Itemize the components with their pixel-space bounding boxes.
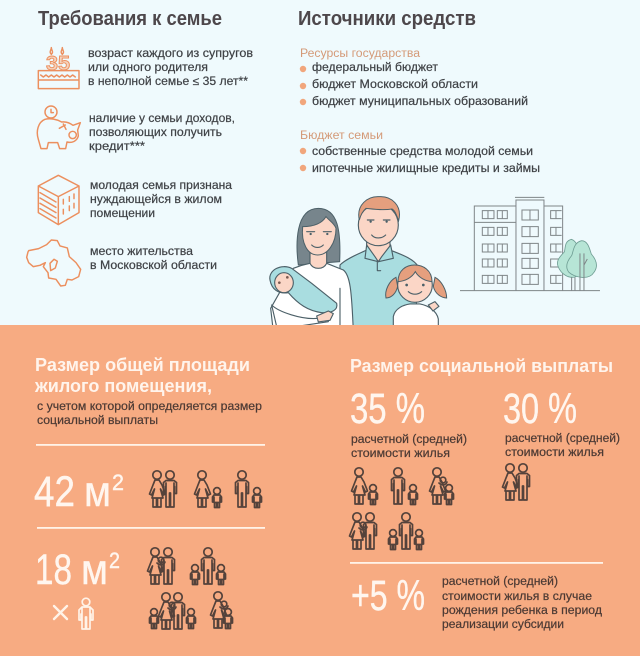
text: plus 5 percent caption: расчетной (средней)	[442, 576, 558, 588]
stat: 35 percent: 35 %	[350, 385, 425, 433]
text: income requirement: позволяющих получить	[89, 127, 222, 139]
text: 35 percent caption: стоимости жилья	[351, 448, 450, 460]
text: plus 5 percent caption: стоимости жилья в случае	[442, 591, 592, 603]
text: housing need: помещении	[90, 208, 155, 220]
list: state budget items: федеральный бюджет	[312, 62, 439, 74]
stat: 30 percent: 30 %	[503, 385, 577, 433]
icon: Moscow region map	[27, 240, 81, 286]
text: plus 5 percent caption: рождения ребенка в период	[442, 605, 602, 617]
icon: piggy bank with coin	[37, 106, 80, 149]
text: 30 percent caption: стоимости жилья	[505, 447, 604, 459]
heading: floor area	[34, 354, 250, 396]
list: state budget items	[300, 62, 528, 108]
text: income requirement: кредит***	[89, 141, 146, 153]
woman with baby	[270, 208, 353, 332]
illustration: apartment building and trees	[460, 197, 600, 291]
label: family budget: Бюджет семьи	[300, 130, 383, 142]
stat: 18 square metres: 2	[109, 548, 120, 573]
label: state resources: Ресурсы государства	[300, 48, 421, 60]
icons: families for 42 m2	[150, 471, 262, 508]
list: family budget items	[300, 146, 540, 175]
text: plus 5 percent caption: реализации субсидии	[442, 619, 564, 631]
heading: sources: Источники средств	[298, 8, 476, 30]
list: state budget items: бюджет Московской области	[312, 79, 478, 91]
text: 35 percent caption: расчетной (средней)	[351, 434, 467, 446]
background: upper light panel	[0, 0, 640, 326]
stat: 42 square metres: 42	[34, 468, 75, 516]
text: floor area subtitle: социальной выплаты	[37, 415, 158, 427]
text: 30 percent caption: расчетной (средней)	[505, 433, 620, 445]
icons: families for 18 m2	[148, 548, 232, 629]
girl	[386, 265, 447, 332]
text: age requirement: или одного родителя	[88, 62, 208, 74]
text: floor area subtitle: с учетом которой определяется размер	[37, 401, 262, 413]
panel: requirements for the family	[27, 8, 253, 286]
icon: birthday cake 35: 35	[46, 53, 70, 75]
text: residence	[90, 246, 217, 272]
man	[340, 197, 418, 332]
icons: families for 35 percent	[350, 468, 454, 550]
text: housing need	[90, 180, 233, 220]
icon: times one person	[54, 598, 93, 629]
text: age requirement: в неполной семье ≤ 35 лет**	[88, 76, 249, 88]
list: family budget items: ипотечные жилищные кредиты и займы	[312, 163, 540, 175]
stat: 18 square metres	[35, 546, 120, 594]
panel: sources of funds	[298, 8, 540, 175]
stat: 42 square metres	[34, 468, 124, 516]
text: income requirement: наличие у семьи доходов,	[89, 113, 235, 125]
stat: 18 square metres: 18	[35, 546, 72, 594]
text: housing need: молодая семья признана	[90, 180, 233, 192]
list: family budget items: собственные средства молодой семьи	[312, 146, 533, 158]
icon: apartment block	[38, 175, 79, 225]
panel: lower orange area	[0, 325, 640, 656]
text: residence: место жительства	[90, 246, 194, 258]
text: age requirement: возраст каждого из супругов	[88, 48, 253, 60]
text: income requirement	[89, 113, 235, 153]
panel: total floor area	[34, 354, 265, 629]
icon: birthday cake 35	[38, 48, 79, 89]
stat: plus 5 percent: +5 %	[351, 572, 425, 620]
icons: couple for 30 percent	[502, 464, 530, 500]
text: housing need: нуждающейся в жилом	[90, 194, 222, 206]
text: age requirement	[88, 48, 253, 88]
text: plus 5 percent caption	[442, 576, 602, 631]
stat: 18 square metres: м	[81, 546, 108, 594]
illustration: family	[270, 197, 447, 332]
heading: floor area: жилого помещения,	[34, 375, 212, 396]
heading: requirements: Требования к семье	[38, 8, 222, 30]
heading: social payment: Размер социальной выплаты	[350, 355, 613, 376]
heading: floor area: Размер общей площади	[35, 354, 250, 375]
text: 30 percent caption	[505, 433, 620, 459]
text: 35 percent caption	[351, 434, 467, 460]
panel: social payment size	[350, 355, 620, 631]
stat: 42 square metres: м	[84, 468, 111, 516]
text: floor area subtitle	[37, 401, 262, 427]
list: state budget items: бюджет муниципальных образований	[312, 96, 528, 108]
stat: 42 square metres: 2	[112, 470, 124, 495]
text: residence: в Московской области	[90, 260, 217, 272]
